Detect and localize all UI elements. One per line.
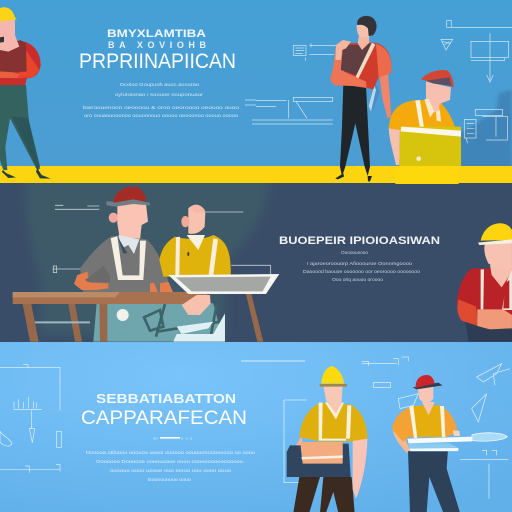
collar skin <box>490 265 512 287</box>
body text: I ajaroeoroouorp Afiooouroe Oonnmgoooo <box>307 261 413 266</box>
back arm <box>379 72 391 119</box>
head <box>484 243 512 268</box>
collar <box>424 99 441 122</box>
front arm <box>330 43 367 88</box>
heading main: PRPRIINAPIICAN <box>79 50 236 73</box>
torso <box>80 236 170 293</box>
sketch: left dimension <box>53 266 80 273</box>
body text: Daooood baouoe ooooooo oor oeoroooo oooooooo <box>303 269 421 274</box>
body text: Ooooouoooo <box>341 250 369 255</box>
body text: Ooo oriq aouoo oroooo <box>332 277 384 282</box>
neck <box>327 400 342 419</box>
shirt <box>299 403 367 441</box>
blue strap <box>369 83 380 112</box>
straps <box>481 269 512 310</box>
figure: worker with box bottom <box>284 366 367 512</box>
hand <box>453 431 460 436</box>
head <box>417 385 433 403</box>
neck <box>358 33 369 50</box>
figure: worker with plan bottom <box>392 375 507 512</box>
panel: top blue <box>461 90 512 166</box>
divider with label <box>153 436 193 440</box>
desk legs <box>23 294 263 342</box>
laptop base <box>395 166 459 184</box>
bottom heading block <box>81 391 256 482</box>
arm <box>457 299 478 326</box>
chair <box>144 304 220 340</box>
sketch: left box <box>256 21 512 143</box>
sketch: lower right frame <box>464 109 508 143</box>
arm <box>74 272 108 290</box>
feet <box>2 168 51 179</box>
sketch: leaf <box>441 39 453 50</box>
cross brace <box>35 321 90 323</box>
middle heading block <box>279 235 440 282</box>
heading line 1: SEBBATIABATTON <box>96 391 236 406</box>
arm <box>389 127 400 165</box>
hand <box>0 71 20 78</box>
top blueprint sketches <box>245 21 512 143</box>
divider with label: ooo <box>181 436 193 440</box>
desk top <box>13 292 210 304</box>
right arm <box>353 439 367 499</box>
collar <box>422 402 435 415</box>
plan <box>407 437 473 443</box>
background shape: top right shadow <box>459 90 512 170</box>
collar <box>187 235 205 250</box>
apron lower <box>93 303 223 342</box>
vest <box>341 43 371 76</box>
neck and face <box>426 82 451 113</box>
head <box>357 25 369 37</box>
legs <box>340 83 370 177</box>
sketch: left frame <box>0 365 61 473</box>
heading main: CAPPARAFECAN <box>81 408 247 429</box>
collar <box>118 235 139 254</box>
body text: Dnoooa otiloooo ooouoo uoooi ouonoo oouooonoooooooo oo oooo <box>86 450 256 455</box>
sketch: beam diagram <box>256 97 333 124</box>
body text: Eoonouoouo oouo <box>148 477 192 482</box>
box <box>301 442 343 464</box>
cap <box>421 70 454 87</box>
shirt <box>457 268 512 315</box>
body text: oooouo oooo uoooe ouo Ioooo oou oooo oooo <box>110 468 232 473</box>
left arm <box>393 429 410 453</box>
head <box>117 203 148 240</box>
body text: bwroouenoon oeoooou & oroo oeoroooo oeouoo ouoo <box>83 105 240 110</box>
figure: worker at desk <box>74 187 223 342</box>
body text: Ooooooo Doooooe oooouoooe oooo oooooooooooooooo <box>96 459 244 464</box>
vest <box>0 40 27 73</box>
badge <box>187 252 189 256</box>
shirt <box>389 100 456 130</box>
hat <box>113 187 146 204</box>
straps <box>409 405 445 438</box>
head <box>0 18 19 52</box>
head <box>323 385 343 404</box>
hard hat <box>321 366 344 384</box>
blueprint frame behind <box>284 400 307 483</box>
strap <box>415 100 424 128</box>
body text: oro oouaouooonoo oouoonouo oouoo oeooonoo ooouo ooooo <box>84 113 239 118</box>
heading: BUOEPEIR IPIOIOASIWAN <box>279 235 440 247</box>
panel: bottom light blue <box>0 342 512 512</box>
helmet <box>481 223 512 241</box>
face <box>188 205 205 234</box>
body text: oylutoionao i soouoe oouponuaor <box>115 92 204 97</box>
torso <box>159 235 231 277</box>
sketch: right plans <box>447 21 512 82</box>
body text <box>303 250 421 282</box>
background shape: teal glow <box>25 175 270 335</box>
straps <box>319 403 351 441</box>
hair <box>357 16 377 36</box>
body text: Dcoloo tzoupuoh auoc aoourao <box>120 82 200 87</box>
panel: middle navy <box>0 175 512 343</box>
badge circle <box>117 309 129 321</box>
apron straps <box>111 236 146 280</box>
figure: woman top centre <box>330 16 392 181</box>
laptop <box>399 127 461 166</box>
figure: woman at desk <box>159 205 231 277</box>
pants <box>465 321 512 342</box>
figure: worker with laptop top right <box>389 70 461 184</box>
hand <box>335 40 351 60</box>
feet <box>335 173 372 181</box>
glasses <box>413 383 443 389</box>
hard hat <box>415 375 435 388</box>
shirt <box>343 43 392 89</box>
straps <box>175 237 218 275</box>
desk with papers <box>13 274 279 342</box>
divider with label: oo <box>153 436 158 440</box>
body text <box>86 450 256 482</box>
sketch: dimension top left <box>55 205 99 209</box>
sketch: face dimension <box>205 211 243 213</box>
hand <box>182 295 211 315</box>
shirt <box>392 405 457 442</box>
figure: worker right middle <box>457 223 512 342</box>
laptop logo <box>416 156 421 161</box>
clipboard <box>168 274 279 294</box>
yellow floor band <box>0 166 512 183</box>
ear <box>109 213 118 223</box>
strap <box>355 43 375 79</box>
sketch: right frame <box>231 265 271 274</box>
heading line 1: BMYXLAMTIBA <box>107 28 206 40</box>
left arm <box>296 435 303 452</box>
legs <box>293 477 355 512</box>
heading line 2: BA XOVIOHB <box>108 40 206 50</box>
sketch: edge marks <box>245 100 256 124</box>
hard hat <box>0 7 17 21</box>
shirt <box>0 41 41 85</box>
body text <box>83 82 240 118</box>
plan tip <box>472 433 507 441</box>
legs <box>0 85 40 171</box>
figure: worker left top <box>0 7 51 179</box>
top heading block <box>79 28 240 118</box>
sketch: right bottom marks <box>362 357 510 499</box>
bottom blueprint sketches <box>0 357 510 499</box>
middle blueprint sketches <box>53 205 271 274</box>
dark bag <box>287 444 351 477</box>
legs <box>408 449 460 512</box>
sketch: top right line <box>241 360 305 362</box>
